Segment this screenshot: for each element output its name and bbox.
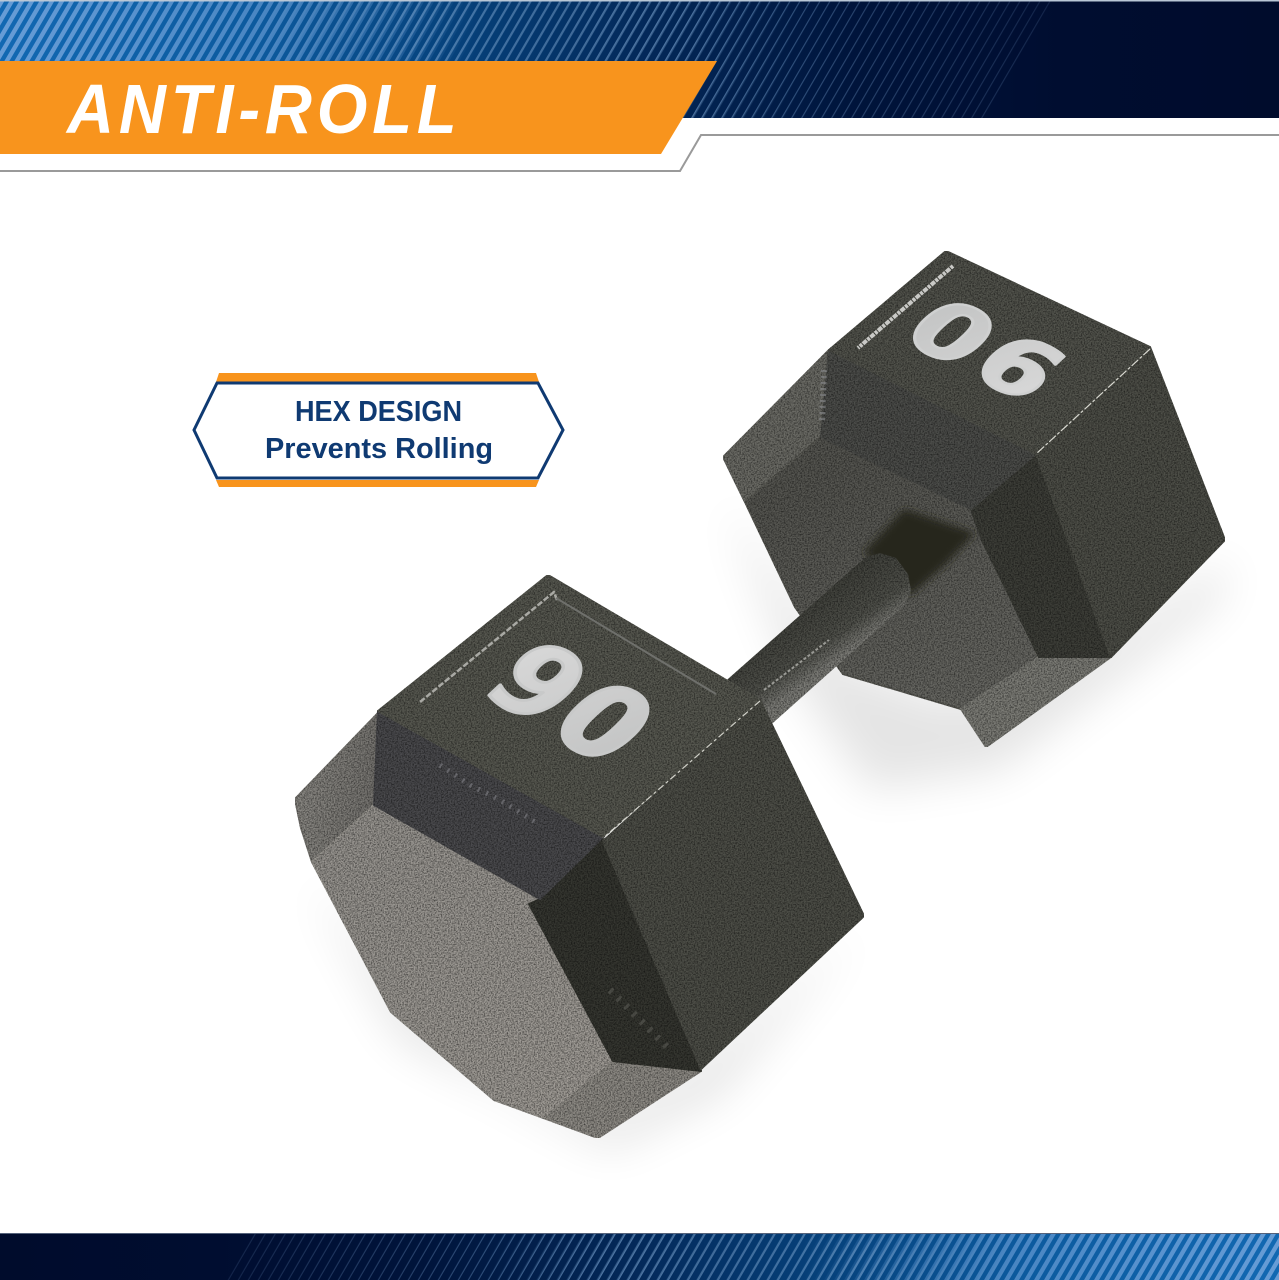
front dark triangular chamfer: [529, 837, 701, 1071]
front number face: [378, 575, 760, 837]
dumbbell: [295, 251, 1225, 1138]
front side face: [603, 700, 864, 1069]
back socket shadow: [864, 509, 975, 595]
handle bar: [720, 553, 911, 730]
back chamfer top: [821, 350, 1036, 509]
callout heading: HEX DESIGN: [295, 396, 462, 428]
back end face lower chamfer: [961, 657, 1111, 747]
front end face: [312, 805, 620, 1138]
front head edge highlights: [420, 592, 760, 1050]
orange top bar: [216, 373, 539, 382]
back number face: [829, 251, 1150, 454]
navy hexagon outline: [194, 383, 563, 478]
orange banner shape: [0, 61, 717, 154]
front weight number: 90: [459, 621, 686, 789]
title text: ANTI-ROLL: [65, 71, 457, 149]
header stripe band: [0, 0, 1279, 118]
back end face: [745, 437, 1045, 709]
back end face upper chamfer: [723, 350, 829, 502]
floor shadows: [310, 500, 1230, 1150]
orange bottom bar: [216, 480, 539, 487]
callout: hex design: [194, 373, 563, 487]
front hex head: [295, 575, 864, 1138]
back dark chamfer right: [971, 454, 1111, 657]
handle specks: [764, 640, 829, 690]
title banner: [0, 61, 717, 154]
back head edge highlights: [822, 266, 1150, 454]
back hex head: [723, 251, 1225, 747]
front chamfer top: [374, 711, 603, 899]
back side face: [1036, 347, 1225, 657]
front end upper chamfer: [295, 713, 378, 862]
handle: [720, 553, 911, 730]
footer stripe band: [0, 1233, 1279, 1280]
header white cut-in and grey outline: [0, 118, 1279, 171]
callout subheading: Prevents Rolling: [265, 433, 493, 465]
front end lower chamfer: [545, 1062, 701, 1138]
back weight number: 90: [880, 276, 1090, 415]
